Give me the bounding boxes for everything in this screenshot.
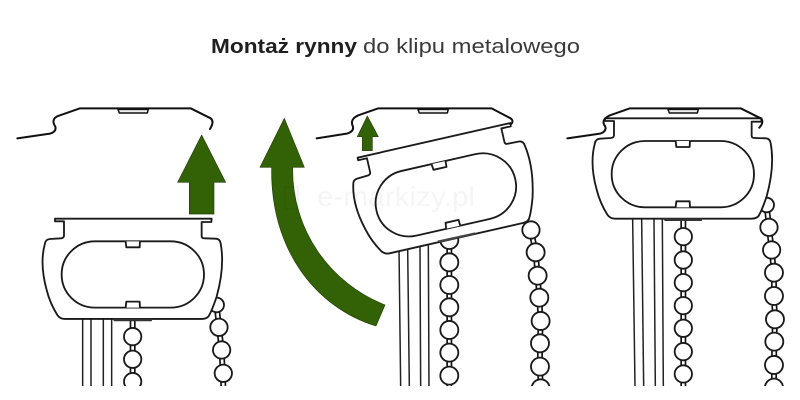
plate under body bbox=[113, 319, 153, 321]
title: Montaż rynny bbox=[211, 36, 358, 58]
metal clip bbox=[567, 108, 762, 138]
metal clip bbox=[17, 108, 212, 138]
right bead chain bbox=[522, 221, 550, 397]
arrow: small up bbox=[357, 116, 378, 151]
centre bead chain bbox=[440, 231, 458, 386]
centre bead chain bbox=[124, 320, 141, 390]
gutter body bbox=[593, 118, 772, 219]
arrow: up bbox=[178, 135, 226, 214]
rail lines bbox=[399, 243, 429, 386]
panel: step 2 body rotating into clip bbox=[260, 108, 550, 397]
right bead chain bbox=[759, 198, 784, 397]
panel: step 1 clip separated from rail bbox=[17, 108, 232, 390]
plate under body bbox=[663, 218, 703, 221]
right bead chain bbox=[209, 298, 232, 386]
rail lines bbox=[633, 219, 663, 386]
arrow: large curved bbox=[260, 118, 385, 326]
plate under tilted body bbox=[437, 232, 476, 243]
left rail lines bbox=[83, 319, 112, 386]
panel: step 3 body mounted in clip bbox=[567, 108, 784, 397]
title: do klipu metalowego bbox=[363, 36, 580, 58]
gutter body tilted bbox=[345, 121, 543, 258]
watermark: e-markizy.pl bbox=[317, 181, 475, 212]
centre bead chain bbox=[675, 220, 692, 386]
metal clip bbox=[317, 108, 512, 138]
gutter body bbox=[43, 219, 222, 319]
